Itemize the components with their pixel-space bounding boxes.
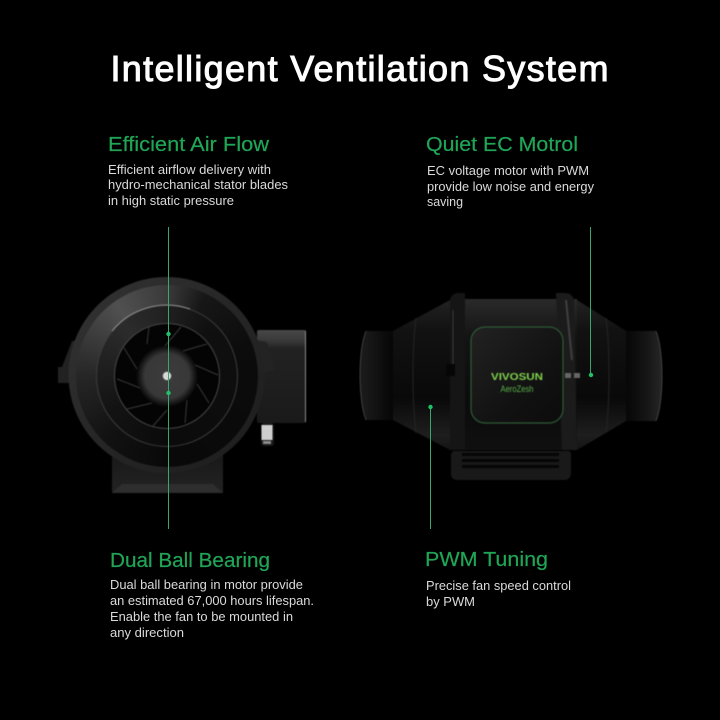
- feature: Efficient Air Flow: Efficient Air Flow: [108, 134, 270, 156]
- feature: Dual Ball Bearing: Dual Ball Bearing: [110, 550, 270, 572]
- feature: Efficient Air Flow: in high static pressure: [108, 194, 234, 208]
- straps: [450, 293, 465, 450]
- panel: [471, 327, 563, 423]
- cones: [393, 300, 450, 450]
- right pipe: [624, 331, 662, 421]
- feature: Dual Ball Bearing: any direction: [110, 626, 184, 640]
- feature: Efficient Air Flow: hydro-mechanical stator blades: [108, 178, 288, 192]
- left pipe: [360, 331, 394, 420]
- feature: Quiet EC Motrol: provide low noise and energy: [427, 180, 595, 194]
- feature: Quiet EC Motrol: [426, 134, 595, 209]
- feature: PWM Tuning: by PWM: [426, 595, 475, 609]
- title: Intelligent Ventilation System: [110, 48, 608, 89]
- foot: [451, 451, 571, 480]
- logo: VIVOSUN AeroZesh: [491, 372, 543, 394]
- feature: Quiet EC Motrol: EC voltage motor with PWM: [427, 164, 589, 178]
- logo: VIVOSUN AeroZesh: VIVOSUN: [491, 372, 543, 383]
- feature: PWM Tuning: PWM Tuning: [425, 549, 548, 571]
- feature: Efficient Air Flow: Efficient airflow delivery with: [108, 163, 271, 177]
- feature: Dual Ball Bearing: an estimated 67,000 hours lifespan.: [110, 594, 314, 608]
- feature: Dual Ball Bearing: Dual ball bearing in motor provide: [110, 578, 303, 592]
- feature: PWM Tuning: Precise fan speed control: [426, 579, 571, 593]
- feature: Efficient Air Flow: [108, 134, 288, 208]
- feature: Dual Ball Bearing: Enable the fan to be mounted in: [110, 610, 293, 624]
- logo: VIVOSUN AeroZesh: AeroZesh: [500, 384, 534, 394]
- feature: Quiet EC Motrol: saving: [427, 195, 463, 209]
- body: [450, 299, 577, 450]
- feature: PWM Tuning: [425, 549, 571, 609]
- feature: Dual Ball Bearing: [110, 550, 314, 640]
- feature: Quiet EC Motrol: Quiet EC Motrol: [426, 134, 578, 156]
